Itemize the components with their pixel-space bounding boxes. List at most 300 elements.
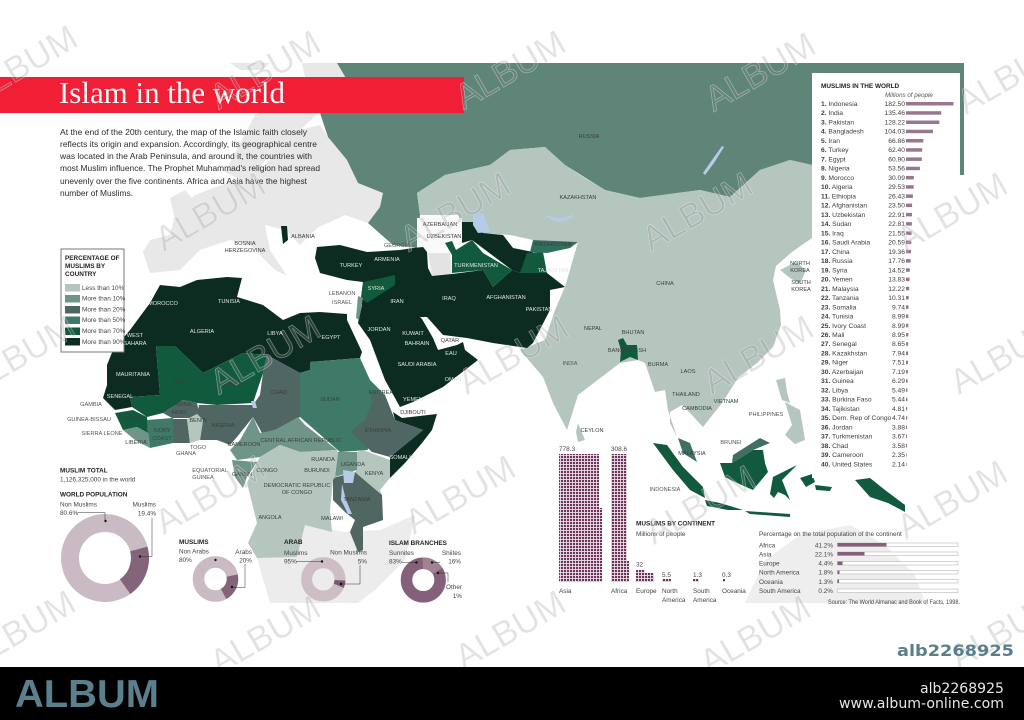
land: Kazakhstan and Asia, less than 10 percent — [417, 147, 812, 444]
legend: percentage of Muslims by country — [61, 249, 126, 352]
chart: percentage of continent population: Africa — [759, 542, 776, 550]
map labels: Africa: ANGOLA — [258, 515, 282, 521]
ranking names: 9. Morocco — [821, 175, 854, 182]
legend: percentage of Muslims by country: More than 50% — [82, 317, 126, 324]
ranking values: 21.55 — [888, 230, 905, 237]
chart: percentage of continent population: North America — [759, 570, 800, 576]
map labels: Asia: BURMA — [648, 362, 668, 368]
map labels: Africa: ALBANIA — [291, 234, 315, 240]
donut: Islam branches: Other — [446, 584, 463, 591]
chart: Muslims by continent unit columns: 308.6 — [611, 446, 627, 453]
intro text: number of Muslims. — [60, 188, 133, 198]
map labels: Asia: TAJIKISTAN — [538, 268, 568, 274]
watermarks: ALBUM — [398, 448, 522, 542]
heading: Muslims by continent: MUSLIMS BY CONTINENT — [636, 520, 715, 528]
countries: Africa, less than 10 percent — [187, 414, 390, 558]
watermarks: ALBUM — [203, 588, 327, 682]
source note: Source: The World Almanac and Book of Facts, 1998. — [828, 599, 960, 606]
map labels: Africa: COAST — [152, 436, 172, 442]
ranking values: 29.53 — [888, 184, 905, 191]
ranking values: 60.90 — [888, 156, 905, 163]
donut: world population: Non Muslims — [60, 502, 97, 508]
intro text: most Muslim influence. The Prophet Muhammad's religion had spread — [60, 163, 320, 173]
watermarks: ALBUM — [693, 588, 817, 682]
panel: Muslims in the world ranking: Millions of people — [885, 92, 933, 99]
map labels: Africa: TUNISIA — [218, 299, 240, 305]
map labels: Asia: BRUNEI — [720, 440, 742, 446]
ranking values: 19.36 — [888, 249, 905, 256]
chart: Muslims by continent unit columns: Europe — [636, 588, 657, 595]
map labels: Africa: LIBERIA — [125, 440, 147, 446]
map labels: Africa: EQUATORIAL — [192, 468, 228, 474]
chart: percentage of continent population: 4.4% — [818, 560, 833, 568]
ranking values: 8.99 — [892, 314, 905, 320]
chart: Muslims by continent unit columns: 5.5 — [662, 572, 671, 579]
watermarks: ALBUM — [148, 448, 272, 542]
map labels: Asia: CAMBODIA — [682, 406, 712, 412]
ranking names: 25. Ivory Coast — [821, 323, 866, 330]
legend: percentage of Muslims by country: COUNTRY — [65, 271, 97, 278]
map labels: Asia: GEORGIA — [384, 243, 410, 249]
ranking values: 9.74 — [892, 304, 905, 311]
map labels: Middle East: IRAN — [390, 299, 404, 305]
map labels: Asia: NEPAL — [584, 326, 602, 332]
donut: Muslims, Arabs and non Arabs: MUSLIMS — [179, 539, 209, 546]
Caspian sea — [428, 253, 452, 276]
donut: Islam branches: 1% — [453, 593, 462, 600]
intro text: At the end of the 20th century, the map of the Islamic faith closely — [60, 127, 308, 137]
ranking names: 23. Somalia — [821, 304, 857, 311]
donut: Islam branches: ISLAM BRANCHES — [389, 540, 448, 547]
chart: Muslims by continent unit columns: Oceania — [722, 588, 746, 595]
map labels: Africa: NIGER — [224, 382, 242, 388]
donut: world population: Muslims — [133, 502, 156, 508]
map labels: Africa: CONGO — [256, 468, 278, 474]
ranking values: 53.56 — [888, 166, 905, 173]
donut: Muslims, Arabs and non Arabs — [179, 539, 252, 599]
intro text: was located in the Arab Peninsula, and around it, the countries with — [59, 151, 312, 161]
map labels: Africa: RUANDA — [311, 457, 335, 463]
chart: Muslims by continent unit columns: North — [662, 588, 678, 595]
map labels: Middle East: SYRIA — [368, 286, 385, 292]
map labels: Africa: GAMBIA — [80, 402, 102, 408]
map labels: Asia: KAZAKHSTAN — [560, 195, 596, 201]
ranking names: 10. Algeria — [821, 184, 853, 191]
ranking values: 13.83 — [888, 277, 905, 284]
map labels: Africa: ALGERIA — [190, 329, 214, 335]
countries: Lebanon and Israel — [356, 296, 363, 320]
map labels: Middle East: YEMEN — [403, 397, 423, 403]
map labels: Asia: BANGLADESH — [608, 348, 646, 354]
country: Kirghizstan — [530, 240, 578, 253]
countries: Malaysia and Sabah — [678, 438, 770, 463]
map labels: Asia: INDIA — [563, 361, 578, 367]
countries: Somalia and Djibouti — [390, 412, 437, 478]
ranking values: 17.76 — [888, 258, 905, 265]
ranking names: 8. Nigeria — [821, 166, 850, 173]
land: southern Africa relief — [257, 515, 415, 603]
map labels: Africa: UGANDA — [341, 462, 365, 468]
map labels: Africa: TANZANIA — [343, 497, 371, 503]
water: lakes and rivers — [251, 146, 724, 514]
watermarks: ALBUM — [393, 165, 517, 259]
map labels: Middle East: JORDAN — [368, 327, 390, 333]
map labels: Middle East: LEBANON — [329, 291, 355, 297]
intro text: reflects its origin and expansion. Accordingly, its geographical centre — [60, 139, 317, 149]
chart: percentage of continent population: 0.2% — [818, 588, 833, 595]
legend: percentage of Muslims by country: More than 10% — [82, 296, 126, 302]
ranking names: 39. Cameroon — [821, 452, 864, 459]
ranking names: 11. Ethiopia — [821, 193, 856, 200]
chart: percentage of continent population: 1.8% — [818, 570, 833, 576]
ranking names: 35. Dem. Rep of Congo — [821, 415, 892, 422]
map labels: Asia: KOREA — [790, 268, 810, 274]
map labels: Asia: KOREA — [791, 287, 811, 293]
ranking names: 40. United States — [821, 461, 873, 468]
watermarks: ALBUM — [148, 165, 272, 259]
ranking names: 29. Niger — [821, 360, 849, 367]
ranking names: 15. Iraq — [821, 230, 844, 237]
ranking values: 182.50 — [885, 101, 905, 108]
map labels: Middle East: QATAR — [441, 338, 459, 344]
ranking names: 12. Afghanistan — [821, 203, 867, 210]
watermarks: ALBUM — [448, 23, 572, 117]
countries: more than 20 percent — [163, 355, 423, 552]
ranking values: 3.58 — [892, 443, 905, 450]
map labels: Africa: GABON — [232, 472, 252, 478]
ranking values: 4.81 — [892, 406, 905, 413]
donut: Arab: Muslims — [284, 550, 307, 557]
ranking values: 2.14 — [892, 461, 905, 468]
countries: more than 50 percent — [147, 358, 385, 452]
ranking names: 4. Bangladesh — [821, 129, 864, 136]
ranking values: 8.95 — [892, 332, 905, 339]
ranking values: 20.59 — [888, 240, 905, 247]
ranking names: 17. China — [821, 249, 850, 256]
ranking values: 8.65 — [892, 341, 905, 348]
donut: Arab: 95% — [284, 558, 297, 566]
map labels: Asia: CHINA — [656, 281, 674, 287]
map labels: Asia: TURKMENISTAN — [454, 263, 498, 269]
ranking values: 3.88 — [892, 424, 905, 431]
chart: Muslims by continent unit columns: 0.3 — [722, 572, 731, 579]
map labels: Africa: MALI — [172, 379, 186, 385]
chart: percentage of continent population: 1.3% — [818, 579, 833, 586]
legend: percentage of Muslims by country: PERCENTAGE OF — [65, 255, 120, 262]
map labels: Middle East: ISRAEL — [332, 300, 352, 306]
map labels: Africa: SUDAN — [320, 397, 340, 403]
ranking names: 37. Turkmenistan — [821, 434, 873, 441]
donut: Muslims, Arabs and non Arabs: 20% — [239, 558, 252, 564]
ranking values: 14.52 — [888, 267, 905, 274]
intro text: unevenly over the five continents. Africa and Asia have the highest — [60, 176, 308, 186]
chart: Muslims by continent unit columns: Africa — [611, 588, 628, 595]
map labels: Asia: AZERBAIJAN — [423, 222, 457, 228]
countries: more than 90 percent, North Africa — [103, 277, 362, 410]
ranking names: 19. Syria — [821, 267, 848, 274]
ranking values: 2.35 — [892, 452, 905, 459]
chart: percentage of continent population: Asia — [759, 552, 772, 558]
footer logo: ALBUM — [15, 673, 159, 716]
ranking names: 31. Guinea — [821, 378, 854, 385]
ranking values: 8.99 — [892, 323, 905, 330]
watermarks: ALBUM — [635, 165, 759, 259]
legend: percentage of Muslims by country: Less than 10% — [82, 285, 125, 292]
countries: more than 90 percent, Arabian peninsula — [358, 300, 478, 407]
map labels: Asia: INDONESIA — [650, 487, 681, 493]
map labels: Asia: BHUTAN — [622, 330, 644, 336]
map labels: Asia: PHILIPPINES — [749, 412, 784, 418]
ranking values: 22.91 — [888, 212, 905, 219]
watermarks: ALBUM — [203, 23, 327, 117]
watermarks: ALBUM — [638, 458, 762, 552]
ranking values: 5.44 — [892, 397, 905, 404]
map labels: Africa: MALAWI — [321, 516, 343, 522]
map labels: Africa: SIERRA LEONE — [81, 431, 123, 437]
ranking names: 6. Turkey — [821, 147, 849, 154]
map labels: Africa: BENIN — [189, 418, 207, 424]
map labels: Africa: MAURITANIA — [116, 372, 150, 378]
map labels: Africa: MOROCCO — [148, 301, 179, 307]
heading: Muslims by continent: Millions of people — [636, 531, 686, 538]
map labels: Asia: THAILAND — [672, 392, 700, 398]
ranking names: 26. Mali — [821, 332, 845, 339]
legend: percentage of Muslims by country: More than 70% — [82, 328, 126, 335]
map labels: Asia: UZBEKISTAN — [427, 234, 461, 240]
ranking values: 62.40 — [888, 147, 905, 154]
ranking values: 6.29 — [892, 378, 905, 385]
map labels: Africa: ETHIOPIA — [365, 428, 391, 434]
map labels: Africa: GUINEA — [192, 475, 214, 481]
chart: percentage of continent population — [759, 531, 958, 595]
donut: Islam branches: Sunnites — [389, 550, 414, 557]
ranking values: 4.74 — [892, 415, 905, 422]
donut: Arab — [284, 539, 367, 597]
intro text — [59, 127, 320, 198]
ranking names: 33. Burkina Faso — [821, 397, 872, 404]
ranking values: 26.43 — [888, 193, 905, 200]
title: Islam in the world — [59, 76, 285, 110]
map labels: Middle East: DJIBOUTI — [400, 410, 426, 416]
map labels: Africa: GUINEA-BISSAU — [67, 417, 111, 423]
ranking names: 24. Tunisia — [821, 314, 854, 320]
ranking values: 5.49 — [892, 387, 905, 394]
donut: Islam branches: Shiites — [442, 550, 461, 557]
donut: Islam branches: 16% — [448, 558, 461, 566]
map labels: Middle East: ARMENIA — [374, 257, 400, 263]
footer id: alb2268925 — [920, 681, 1004, 697]
map labels: Africa: LIBYA — [267, 331, 283, 337]
countries: Indonesia — [653, 443, 905, 517]
ranking values: 23.50 — [888, 203, 905, 210]
map labels: Africa: WEST — [127, 333, 144, 339]
map labels: Africa: CAMEROON — [228, 442, 260, 448]
map labels: Africa: TOGO — [190, 445, 207, 451]
donut: Islam branches — [389, 540, 463, 600]
map: world base — [103, 63, 964, 603]
map labels: Asia: SOUTH — [791, 280, 811, 286]
ranking values — [885, 101, 905, 468]
donut: world population: 80.6% — [60, 510, 78, 517]
ranking values: 22.81 — [888, 221, 905, 228]
map labels: Africa: EGYPT — [322, 335, 341, 341]
legend: percentage of Muslims by country: More than 20% — [82, 306, 126, 314]
watermarks: ALBUM — [698, 25, 822, 119]
ranking names: 36. Jordan — [821, 424, 853, 431]
chart: percentage of continent population: 22.1% — [815, 552, 833, 558]
map labels: Middle East: OMAN — [445, 377, 461, 383]
chart: percentage of continent population: Oceania — [759, 579, 783, 586]
map labels: Middle East — [329, 257, 552, 416]
ranking names: 21. Malaysia — [821, 286, 859, 293]
ranking names: 1. Indonesia — [821, 101, 858, 108]
map labels: Asia: VIETNAM — [714, 399, 739, 405]
map labels: Middle East: TURKEY — [340, 263, 363, 269]
white area around the Caspian — [417, 218, 462, 276]
ranking names: 16. Saudi Arabia — [821, 240, 870, 247]
map labels: Asia: NORTH — [790, 261, 810, 267]
map labels: Africa: BOSNIA — [234, 241, 256, 247]
map labels: Middle East: AFGHANISTAN — [486, 295, 526, 301]
map labels: Asia — [384, 134, 811, 493]
donut: world population — [60, 492, 156, 601]
map labels: Africa: SENEGAL — [107, 394, 133, 400]
map labels: Africa — [67, 234, 415, 522]
land: Australia relief — [745, 525, 925, 603]
map labels: Middle East: SAUDI ARABIA — [398, 362, 437, 368]
ranking values: 3.67 — [892, 434, 905, 441]
chart: Muslims by continent unit columns: 1.3 — [693, 572, 702, 579]
chart: percentage of continent population: 41.2% — [815, 542, 833, 550]
ranking values: 12.22 — [888, 286, 905, 293]
countries: more than 90 percent, Turkey to Pakistan — [315, 245, 565, 348]
watermarks: ALBUM — [203, 308, 327, 402]
map labels: Africa: BURUNDI — [304, 468, 330, 474]
chart: percentage of continent population: Europe — [759, 560, 780, 568]
chart: Muslims by continent unit columns: Asia — [559, 588, 572, 595]
ranking names: 27. Senegal — [821, 341, 857, 348]
donut: Muslims, Arabs and non Arabs: 80% — [179, 557, 192, 564]
map labels: Africa: HERZEGOVINA — [225, 248, 266, 254]
ranking values: 30.09 — [888, 175, 905, 182]
donut: world population: WORLD POPULATION — [60, 492, 128, 498]
map labels: Africa: CENTRAL AFRICAN REPUBLIC — [260, 438, 342, 444]
donut: Arab: Non Muslims — [330, 550, 367, 556]
map labels: Africa: GHANA — [176, 451, 196, 457]
ranking names: 5. Iran — [821, 138, 840, 145]
chart: Muslims by continent unit columns — [559, 446, 746, 604]
ranking names: 7. Egypt — [821, 156, 846, 163]
map labels: Africa: NIGERIA — [211, 423, 235, 429]
map labels: Africa: CHAD — [271, 390, 287, 396]
ranking names: 22. Tanzania — [821, 295, 859, 302]
ranking values: 7.51 — [892, 360, 905, 367]
donut: Islam branches: 83% — [389, 558, 402, 566]
panel: Muslims in the world ranking: MUSLIMS IN THE WORLD — [821, 83, 899, 90]
Muslim total: 1,126,325,000 in the world — [60, 476, 136, 484]
map labels: Middle East: EAU — [445, 351, 457, 357]
Muslim total: MUSLIM TOTAL — [60, 468, 108, 474]
map labels: Africa: BURKINA — [167, 402, 192, 408]
ranking bars — [906, 102, 954, 466]
map labels: Middle East: KUWAIT — [402, 331, 424, 337]
map labels: Asia: KIRGHIZSTAN — [534, 242, 572, 248]
watermarks: ALBUM — [448, 583, 572, 677]
land: Russia — [320, 63, 964, 248]
panel: Muslims in the world ranking — [812, 73, 960, 478]
donut: Arab: 5% — [358, 558, 367, 566]
ranking names: 14. Sudan — [821, 221, 852, 228]
ranking values: 7.94 — [892, 350, 905, 358]
ranking values: 135.46 — [885, 110, 905, 117]
legend: percentage of Muslims by country: More than 90% — [82, 339, 126, 346]
ranking names: 38. Chad — [821, 443, 848, 450]
map labels: Africa: GUINEA — [122, 416, 144, 422]
chart: percentage of continent population: South America — [759, 588, 801, 595]
ranking names: 32. Libya — [821, 387, 848, 394]
map labels: Asia: LAOS — [681, 369, 696, 375]
ranking names: 34. Tajikistan — [821, 406, 860, 413]
donut: Muslims, Arabs and non Arabs: Non Arabs — [179, 548, 209, 556]
ranking names — [821, 101, 892, 468]
chart: Muslims by continent unit columns: America — [693, 597, 717, 604]
ranking values: 7.19 — [892, 369, 905, 376]
watermarks: ALBUM — [696, 308, 820, 402]
ranking names: 28. Kazakhstan — [821, 350, 867, 358]
donut: world population: 19.4% — [138, 510, 156, 518]
map labels: Asia: MALAYSIA — [678, 451, 706, 457]
countries: more than 70 percent — [115, 240, 638, 433]
map labels: Middle East: BAHRAIN — [405, 341, 429, 347]
country: Uzbekistan — [462, 222, 533, 273]
ranking names: 13. Uzbekistan — [821, 212, 866, 219]
map labels: Middle East: PAKISTAN — [526, 307, 552, 313]
chart: Muslims by continent unit columns: South — [693, 588, 710, 595]
chart: percentage of continent population: Percentage on the total population of the continent — [759, 531, 902, 538]
stock id: alb2268925 — [897, 641, 1014, 660]
ranking names: 20. Yemen — [821, 277, 853, 284]
map labels: Africa: FASO — [172, 410, 187, 416]
donut: Muslims, Arabs and non Arabs: Arabs — [235, 549, 252, 556]
map labels: Africa: OF CONGO — [282, 490, 313, 496]
title bar — [0, 76, 464, 113]
ranking names: 18. Russia — [821, 258, 853, 265]
ranking names: 30. Azerbaijan — [821, 369, 864, 376]
ranking values: 66.86 — [888, 138, 905, 145]
watermarks: ALBUM — [890, 453, 1014, 547]
map labels: Africa: SAHARA — [123, 341, 147, 347]
footer bar — [0, 667, 1024, 720]
Muslim total — [60, 468, 136, 484]
watermarks: ALBUM — [451, 308, 575, 402]
map labels: Africa: KENYA — [365, 471, 384, 477]
ranking names: 2. India — [821, 110, 843, 117]
countries: more than 10 percent — [123, 417, 357, 488]
chart: Muslims by continent unit columns: 778.3 — [559, 446, 575, 453]
chart: Muslims by continent unit columns: America — [662, 597, 686, 604]
map labels: Africa: IVORY — [153, 428, 171, 434]
country: Albania — [281, 226, 288, 244]
ranking values: 10.31 — [888, 295, 905, 302]
heading: Muslims by continent — [636, 520, 715, 538]
map labels: Asia: CEYLON — [580, 428, 604, 434]
ranking values: 104.03 — [885, 129, 905, 136]
map labels: Africa: SOMALIA — [390, 455, 415, 461]
watermarks: ALBUM — [890, 165, 1014, 259]
ranking names: 3. Pakistan — [821, 120, 854, 126]
legend: percentage of Muslims by country: MUSLIMS BY — [65, 263, 106, 270]
footer url: www.album-online.com — [839, 696, 1004, 712]
